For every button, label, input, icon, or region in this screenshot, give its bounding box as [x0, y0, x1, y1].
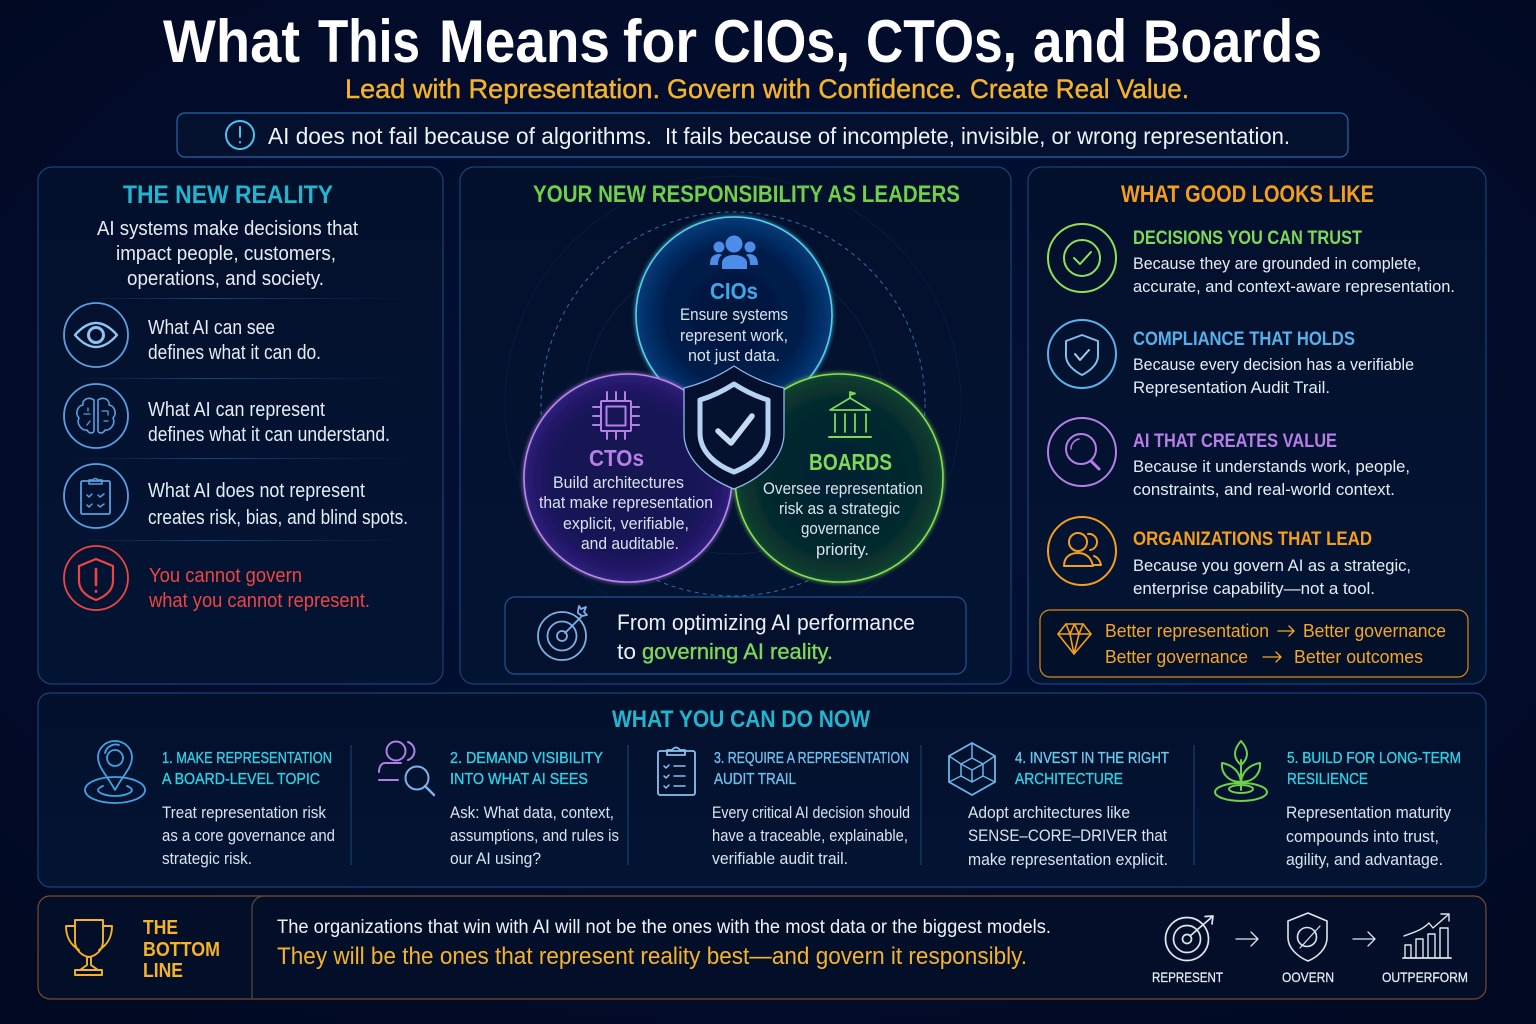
step 2: Ask: What data, context, — [450, 804, 614, 822]
step 4: Adopt architectures like — [968, 804, 1130, 822]
text: what AI can see — [148, 317, 321, 364]
text: CTOs: CTOs — [589, 445, 644, 471]
panel: the new reality — [38, 167, 443, 684]
title: CTOs, — [866, 8, 1017, 75]
text: Boards: governance — [801, 520, 880, 538]
step 4 — [968, 750, 1169, 869]
text: Boards: BOARDS — [809, 449, 892, 475]
callout text — [617, 610, 915, 664]
alert banner — [177, 113, 1348, 157]
item: organizations that lead: enterprise capability—not a tool. — [1133, 579, 1375, 598]
circle: CIOs — [636, 217, 832, 413]
callout text: Better outcomes — [1294, 647, 1423, 667]
text: CIOs: CIOs — [710, 278, 758, 304]
label: govern: OOVERN — [1282, 969, 1334, 985]
label: the bottom line: LINE — [143, 960, 183, 982]
title: This — [318, 8, 420, 75]
step 2: assumptions, and rules is — [450, 827, 619, 845]
icon: trophy — [66, 920, 112, 975]
step 1: strategic risk. — [162, 850, 252, 868]
step 2: 2. DEMAND VISIBILITY — [450, 750, 603, 767]
title: Means — [439, 8, 610, 75]
icon: leaders — [1048, 517, 1116, 585]
step 5 — [1286, 750, 1461, 869]
text: cannot govern: what you cannot represent. — [148, 590, 370, 612]
item: decisions you can trust: DECISIONS YOU CAN TRUST — [1133, 227, 1362, 249]
step 1: A BOARD-LEVEL TOPIC — [162, 771, 320, 788]
label: the bottom line — [143, 917, 220, 982]
step 1 — [162, 750, 335, 868]
intro text: operations, and society. — [127, 268, 324, 290]
title: and — [1033, 8, 1127, 75]
bottom line message: The organizations that win with AI will not be the ones with the most data or the biggest models. — [277, 916, 1051, 938]
step 5: compounds into trust, — [1286, 828, 1439, 846]
heading: your new responsibility: YOUR NEW RESPONSIBILITY AS LEADERS — [533, 181, 960, 208]
icon: chip — [593, 392, 639, 439]
heading: the new reality: THE NEW REALITY — [123, 181, 333, 209]
step 5: Representation maturity — [1286, 804, 1452, 822]
callout text: governing AI reality. — [642, 639, 833, 664]
panel: what good looks like — [1028, 167, 1486, 684]
icon: exclamation — [226, 121, 254, 149]
icon: institution — [829, 392, 871, 437]
item: decisions you can trust: Because they are grounded in complete, — [1133, 254, 1421, 273]
item: organizations that lead: Because you govern AI as a strategic, — [1133, 556, 1411, 575]
title: CIOs, — [713, 8, 850, 75]
step 2: our AI using? — [450, 850, 541, 868]
item: compliance that holds: COMPLIANCE THAT HOLDS — [1133, 328, 1355, 350]
text: CIOs — [680, 278, 788, 365]
text: what AI can see: What AI can see — [148, 317, 275, 339]
text: cannot govern: You cannot govern — [149, 565, 302, 587]
label: the bottom line: BOTTOM — [143, 939, 220, 961]
icon: warning shield — [64, 546, 128, 610]
callout text: From optimizing AI performance — [617, 610, 915, 635]
callout text: Better representation — [1105, 621, 1269, 641]
intro text: impact people, customers, — [116, 243, 336, 265]
text: cannot govern — [148, 565, 370, 612]
step 2: INTO WHAT AI SEES — [450, 771, 588, 788]
icon: check circle — [1048, 224, 1116, 292]
icon: people with magnifier — [379, 742, 434, 795]
text: CIOs: Ensure systems — [680, 306, 788, 324]
icon: outperform chart — [1403, 914, 1451, 958]
callout text: Better governance — [1303, 621, 1446, 641]
text: what AI can see: defines what it can do. — [148, 342, 321, 364]
alert text: It fails because of incomplete, invisible, or wrong representation. — [665, 123, 1290, 149]
heading: what you can do now: WHAT YOU CAN DO NOW — [612, 706, 870, 733]
icon: cube — [949, 743, 995, 795]
text: what AI does not represent: creates risk, bias, and blind spots. — [148, 507, 408, 529]
text: what AI can represent: What AI can represent — [148, 399, 325, 421]
intro text: AI systems make decisions that — [97, 218, 358, 240]
text: Boards: Oversee representation — [763, 480, 923, 498]
item: organizations that lead: ORGANIZATIONS THAT LEAD — [1133, 528, 1372, 550]
step 1: 1. MAKE REPRESENTATION — [162, 750, 332, 767]
title: Boards — [1143, 8, 1322, 75]
item: AI that creates value — [1133, 430, 1410, 499]
icon: shield check — [1048, 320, 1116, 388]
callout: from optimizing — [505, 597, 966, 674]
title: What — [163, 8, 300, 75]
subtitle: Govern with Confidence. — [667, 74, 962, 104]
icon: target — [538, 606, 587, 660]
step 4: make representation explicit. — [968, 851, 1168, 869]
callout text: Better governance — [1105, 647, 1248, 667]
arrow — [1236, 932, 1258, 946]
circle: Boards — [735, 374, 943, 582]
step 1: as a core governance and — [162, 827, 335, 845]
item: compliance that holds: Because every decision has a verifiable — [1133, 355, 1414, 374]
callout text: to — [617, 639, 636, 664]
subtitle — [345, 74, 1189, 104]
step 2 — [450, 750, 619, 868]
text: Boards — [763, 449, 923, 559]
item: compliance that holds: Representation Audit Trail. — [1133, 378, 1330, 397]
icon: location pin — [85, 741, 145, 803]
step 4: ARCHITECTURE — [1015, 771, 1123, 788]
subtitle: Create Real Value. — [970, 74, 1189, 104]
text: what AI can represent — [148, 399, 390, 446]
item: compliance that holds — [1133, 328, 1414, 397]
title: for — [623, 8, 697, 75]
step 4: SENSE–CORE–DRIVER that — [968, 827, 1167, 845]
circle: CTOs — [524, 374, 732, 582]
bottom line message: They will be the ones that represent reality best—and govern it responsibly. — [277, 943, 1027, 970]
icon: diamond — [1058, 624, 1091, 654]
text: what AI does not represent: What AI does not represent — [148, 480, 365, 502]
item: decisions you can trust — [1133, 227, 1455, 296]
text: Boards: priority. — [816, 541, 869, 559]
item: organizations that lead — [1133, 528, 1411, 598]
panel: the bottom line — [38, 896, 1486, 999]
text: CTOs — [539, 445, 713, 553]
step 3: verifiable audit trail. — [712, 850, 848, 868]
item: AI that creates value: Because it understands work, people, — [1133, 457, 1410, 476]
text: CIOs: not just data. — [688, 347, 780, 365]
icon: checklist — [658, 748, 695, 795]
icon: people — [710, 236, 758, 269]
title — [163, 8, 1322, 75]
text: CTOs: Build architectures — [553, 474, 684, 492]
arrow — [1353, 932, 1375, 946]
step 3: AUDIT TRAIL — [714, 771, 796, 788]
item: decisions you can trust: accurate, and context-aware representation. — [1133, 277, 1455, 296]
step 3: 3. REQUIRE A REPRESENTATION — [714, 750, 909, 767]
step 5: RESILIENCE — [1287, 771, 1368, 788]
text: CTOs: that make representation — [539, 494, 713, 512]
venn diagram — [524, 217, 943, 582]
text: CTOs: and auditable. — [581, 535, 679, 553]
callout text — [1105, 621, 1446, 667]
icon: magnifier — [1048, 418, 1116, 486]
step 3: Every critical AI decision should — [712, 804, 910, 822]
text: what AI does not represent — [148, 480, 408, 529]
label: represent: REPRESENT — [1152, 969, 1223, 985]
alert text: AI does not fail because of algorithms. — [268, 123, 652, 149]
icon: brain — [64, 384, 128, 448]
step 3 — [712, 750, 910, 868]
step 5: agility, and advantage. — [1286, 851, 1443, 869]
label: the bottom line: THE — [143, 917, 178, 939]
heading: what good looks like: WHAT GOOD LOOKS LIKE — [1121, 181, 1374, 208]
panel: leader responsibilities — [460, 167, 1011, 684]
text: what AI can represent: defines what it can understand. — [148, 424, 390, 446]
step 5: 5. BUILD FOR LONG-TERM — [1287, 750, 1461, 767]
label: outperform: OUTPERFORM — [1382, 969, 1468, 985]
icon: plant — [1215, 741, 1267, 801]
step 3: have a traceable, explainable, — [712, 827, 908, 845]
step 1: Treat representation risk — [162, 804, 327, 822]
callout: better outcomes — [1040, 610, 1468, 677]
panel: what you can do now — [38, 693, 1486, 887]
text: CTOs: explicit, verifiable, — [563, 515, 689, 533]
step 4: 4. INVEST IN THE RIGHT — [1015, 750, 1169, 767]
icon: eye — [64, 303, 128, 367]
icon: clipboard — [64, 464, 128, 528]
subtitle: Lead with Representation. — [345, 74, 660, 104]
text: CIOs: represent work, — [680, 327, 788, 345]
icon: central shield — [684, 366, 784, 489]
item: AI that creates value: AI THAT CREATES VALUE — [1133, 430, 1337, 452]
bottom line message — [277, 916, 1051, 970]
intro text — [97, 218, 358, 290]
alert text — [268, 123, 1290, 149]
item: AI that creates value: constraints, and real-world context. — [1133, 480, 1395, 499]
icon: govern shield — [1288, 913, 1327, 961]
icon: represent target — [1166, 916, 1213, 960]
text: Boards: risk as a strategic — [779, 500, 900, 518]
